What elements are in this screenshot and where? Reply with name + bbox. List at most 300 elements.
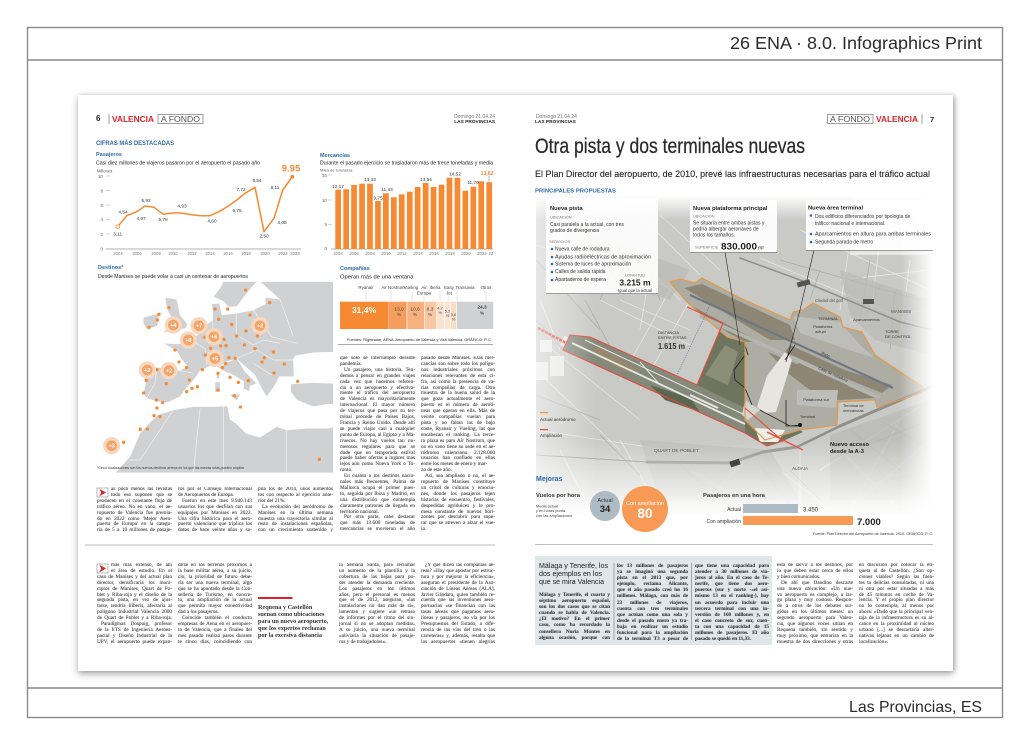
article column 4 bottom <box>339 563 415 645</box>
article column 3 top: rior del 21%. <box>258 498 286 504</box>
chart: airlines stacked bar: Easy <box>444 285 455 290</box>
aerial map: airport expansion <box>536 195 933 515</box>
bar chart: passengers per hour <box>703 493 881 528</box>
boundary: expansion <box>563 307 783 446</box>
article column right 1: de a otros de los debates sur- <box>777 603 853 609</box>
article column 1 bottom: el área de estudio. En el <box>111 568 172 574</box>
article column 1 top: ropuerto de Valencia fue premia- <box>97 510 172 516</box>
sidebar lead column: cuando se habla de Valencia. <box>539 610 610 616</box>
multi-airport bubbles: +4 <box>170 323 177 329</box>
article column 4 bottom: años, pero el personal es menos <box>339 592 415 598</box>
sidebar column 2: 23 millones de viajeros, <box>617 600 688 606</box>
map place labels: Terminal <box>800 414 815 419</box>
sidebar column 2 <box>617 563 688 642</box>
article column 5 top: ródromo valenciano. 2.128.060 <box>421 450 495 456</box>
article column 4 top: cia a un aeropuerto y efectiva- <box>340 385 415 391</box>
stat: flights per hour: Con ampliación <box>626 501 664 507</box>
fades <box>536 195 922 216</box>
article column 5 top: coste, Ryanair y Vueling, las que <box>421 426 495 432</box>
article column 5 bottom: portuarias «se financian con las <box>421 603 495 609</box>
current runway and taxiway <box>690 295 893 388</box>
article column 4 top: merosos regulares para que se <box>340 444 415 450</box>
map place labels: Plataforma <box>813 324 833 329</box>
stat: flights per hour: y en horas punta <box>536 508 566 513</box>
current apron <box>793 316 875 358</box>
sidebar lead column: Málaga y Tenerife, el cuarto y <box>539 592 610 598</box>
panel: new runway: Igual que la actual <box>618 288 652 293</box>
article column 5 top: zontes por descubrir para supe- <box>421 514 495 520</box>
article column right 1 <box>777 563 853 645</box>
chart: cargo bars: 5 <box>324 222 327 227</box>
article column 5 bottom: rencia de las vías del tren o las <box>421 627 495 633</box>
chart: cargo bars: 12,17 <box>332 184 344 189</box>
chart: cargo bars <box>320 153 494 256</box>
chart: cargo bars: 11,70 <box>467 180 479 185</box>
pull quote <box>258 597 329 639</box>
right page header <box>828 114 934 124</box>
article column 4 top: punto de Europa, al Egipto y a Ma- <box>340 432 415 438</box>
road shields <box>729 279 874 467</box>
chart: passengers line: 5,78 <box>158 217 168 222</box>
boundary: current aerodrome <box>670 278 923 440</box>
article column right 1: una nueva ubicación: «Un nue- <box>777 586 853 592</box>
article column 4 bottom: un aumento de la plantilla y la <box>339 568 415 574</box>
article column 2 top: de Aeropuertos de Europa. <box>178 492 234 498</box>
industrial blocks <box>536 336 568 380</box>
article column 1 bottom: Paradigmas Dospuig, profesor <box>101 621 172 627</box>
article column 3 top: resto de instalaciones españolas, <box>258 521 333 527</box>
article column right 1: gidos en los últimos meses: un <box>777 609 853 615</box>
article column 2 bottom: ría ser una nueva terminal, algo <box>178 580 252 586</box>
article column 1 bottom: polígono Industrial Valencia 2000 <box>97 609 172 615</box>
panel: new runway: Nueva pista <box>550 206 583 212</box>
chart: airlines stacked bar: 13,0 <box>394 306 404 312</box>
left page date line <box>454 114 496 125</box>
article column 4 top: rruecos. No hay vuelos tan nu- <box>340 438 415 444</box>
map place labels: QUART DE POBLET <box>654 448 699 454</box>
article column 2 bottom: empresas de Aena en el aeropuer- <box>178 621 252 627</box>
chart: passengers line: 3,11 <box>113 232 122 236</box>
article column 1 bottom: de la ETS de Ingeniería Aeroes- <box>97 627 172 633</box>
chart: passengers line: 2020 <box>260 251 270 256</box>
callout: new access from A-3: Nuevo acceso <box>830 442 869 448</box>
chart: cargo bars: 2004 <box>333 251 343 256</box>
chart: passengers line: 2022 <box>278 251 288 256</box>
article column 4 top: lejos aún como Nueva York o To- <box>340 461 415 467</box>
article column right 2: lencia. Y el propio plan director <box>859 597 934 603</box>
chart: cargo bars: 2008 <box>365 251 375 256</box>
article column 1 top: ría de 5 a 10 millones de pasaje- <box>97 527 172 533</box>
sidebar lead column: séptimo aeropuerto español, <box>539 598 610 604</box>
article column 2 top: Fueron en este mes 9.940.143 <box>182 498 252 504</box>
panel: new runway: Nueva calle de rodadura <box>555 246 610 252</box>
panel: new runway: Ayudas radioeléctricas de aproximación <box>555 254 651 260</box>
article column 2 bottom: mes pasado realizó paros durante <box>178 633 252 639</box>
drop-cap arrow icon, second article <box>97 564 108 573</box>
chart: cargo bars: Miles de toneladas <box>320 168 352 172</box>
article column 4 top: demos a pensar en grandes viajes <box>340 373 415 379</box>
article column right 1: go plazo y muy costoso. Respon- <box>777 597 853 603</box>
panel: new main platform: m² <box>758 246 764 252</box>
chart: passengers line: 9.95 <box>282 164 301 174</box>
map place labels: Pista <box>821 350 831 359</box>
article column 5 bottom: reas? «Hay que apostar por estruc- <box>421 568 495 574</box>
panel: new runway: Calles de salida rápida <box>555 269 606 275</box>
article column right 2: urbano [...] se descartaría alter- <box>859 627 934 633</box>
chart: airlines stacked bar: Compañías <box>340 266 370 272</box>
article column 5 bottom: líneas y pasajeros, no vía por los <box>421 615 495 621</box>
sidebar lead column <box>539 592 610 641</box>
article column 2 bottom: to de Valencia, que a finales del <box>178 627 252 633</box>
pull quote: para un nuevo aeropuerto, <box>258 618 329 625</box>
article column 4 bottom: «aliviaría la situación de pasaje- <box>339 633 415 639</box>
article column 2 bottom: cio, la prioridad de futuro debe- <box>178 574 252 580</box>
map place labels: Calle de rodadura <box>818 365 849 383</box>
article column 5 top: entre los meses de enero y mar- <box>421 461 487 467</box>
panel: new main platform: todos los tamaños. <box>693 232 735 238</box>
chart: passengers line: 6 <box>100 203 103 208</box>
article column 4 top: puede haber ofertas a lugares más <box>340 455 415 461</box>
sidebar column 3: ta con una capacidad de 15 <box>695 624 769 630</box>
chart: airlines stacked bar: 10,6 <box>410 306 420 312</box>
map place labels: Aparcamientos <box>853 317 880 322</box>
sidebar column 3: que tiene una capacidad para <box>695 563 769 569</box>
article column 5 top: cancías son sobre todo los polígo- <box>421 361 495 367</box>
chart: passengers line: 4,08 <box>277 220 287 225</box>
chart: cargo bars: 2022 <box>477 251 487 256</box>
article column 5 bottom: Javier Gándara, quien también re- <box>421 592 495 598</box>
chart: airlines stacked bar: % <box>397 312 402 318</box>
multi-airport bubbles: +3 <box>108 444 115 450</box>
article column 3 top: con un crecimiento sostenido y <box>258 527 333 533</box>
chart: cargo bars: 10 <box>322 198 327 203</box>
leader lines <box>725 250 814 362</box>
panel: new terminal area: Aparcamientos en altura para ambas terminales <box>815 232 932 238</box>
sidebar column 2: funcional para la ampliación <box>617 630 688 636</box>
expansion land <box>697 323 803 446</box>
panel: new runway: Sistema de luces de aproximación <box>555 262 631 268</box>
chart: airlines stacked bar: Vueling <box>404 285 419 290</box>
panel: new runway: UBICACIÓN <box>550 214 572 220</box>
sidebar column 2: ejemplo, reclama Alicante, <box>617 581 688 587</box>
article column 3 top: Manises en la última semana <box>258 510 333 516</box>
sidebar column 3: el caso concreto de sur, cuen- <box>695 618 769 624</box>
sidebar lead column: consellera Nuria Montes en <box>539 629 610 635</box>
stat: flights per hour: con las ampliaciones <box>536 513 572 518</box>
article column 5 top: no en vano tiene su sede en el ae- <box>421 444 495 450</box>
chart: cargo bars: 2020 <box>461 251 471 256</box>
left page header: VALENCIA <box>112 114 154 124</box>
article column right 1: segundo aeropuerto para Valen- <box>777 615 853 621</box>
article column right 2: localización». <box>859 639 888 645</box>
map place labels <box>654 298 912 471</box>
article column 5 top: puerto es el número de aerolí- <box>421 402 495 408</box>
distance line between runways <box>677 305 710 375</box>
chart: cargo bars: 2016 <box>429 251 439 256</box>
chart: airlines stacked bar: % <box>438 310 442 315</box>
right page date line <box>535 114 577 125</box>
article column 4 top: minal procede de Países Bajos, <box>340 414 415 420</box>
article column 5 top: Así, sea ampliado o no, el ae- <box>425 473 495 479</box>
chart: passengers line: Pasajeros <box>96 152 122 158</box>
article column 2 top: Una cifra histórica para el aero- <box>178 516 252 522</box>
bar chart: passengers per hour: 3.450 <box>803 508 819 514</box>
panel: new runway: Apartaderos de espera <box>555 277 606 283</box>
legend: Ampliación <box>540 433 563 438</box>
sidebar column 3 <box>695 563 769 642</box>
sidebar lead column: caso, como ha recordado la <box>539 622 610 628</box>
article column 3 top: muestra una trayectoria similar al <box>258 516 333 522</box>
chart: passengers line: 2010 <box>168 251 178 256</box>
stat: flights per hour: Media actual <box>536 504 558 508</box>
sidebar column 3: nerife, que tiene dos aero- <box>695 581 769 587</box>
callout: runway distance: ENTRE PISTAS <box>658 335 687 340</box>
article column 2 bottom: to, una ampliación de la actual <box>178 597 252 603</box>
panel: new terminal area: Dos edificios diferenciados por tipología de <box>815 214 911 220</box>
callout: runway distance: 1.615 m <box>658 342 685 351</box>
article column 5 top: encabezan el ranking. La terce- <box>421 432 495 438</box>
article column right 2: taja de la infraestructura es su al- <box>859 615 934 621</box>
land masses <box>116 282 333 473</box>
chart: passengers line: 2004 <box>113 251 123 256</box>
panel: new runway: 3.215 m <box>619 278 651 288</box>
article column 4 bottom: que el de 2012, aseguran, «las <box>339 597 415 603</box>
article column 5 top: nes, donde los pasajeros tejen <box>421 491 495 497</box>
panel: new runway: Casi paralela a la actual, con tres <box>550 222 624 228</box>
main title: Otra pista y dos terminales nuevas <box>535 134 805 158</box>
article column 4 top: Por otra parte, cabe destacar <box>344 514 415 520</box>
callout: new access from A-3 <box>830 442 869 455</box>
bar chart: passengers per hour: Con ampliación <box>707 519 741 525</box>
heading: destinations <box>98 265 248 280</box>
chart: airlines stacked bar: % <box>480 310 485 316</box>
chart: airlines stacked bar: % <box>452 316 456 322</box>
destination dots <box>122 288 321 461</box>
article column 2 top: datos de hace veinte años y su- <box>178 527 252 533</box>
darker urban blocks <box>640 258 924 496</box>
article column 4 top: territorio nacional. <box>340 509 379 515</box>
sidebar lead column: ¿El motivo? En el primer <box>539 616 610 622</box>
chart: passengers line: 2008 <box>151 251 161 256</box>
article column 5 bottom: cuerda que las inversiones aero- <box>421 597 495 603</box>
article column 1 bottom: caso de Manises y del actual plan <box>97 574 172 580</box>
chart: passengers line: 2014 <box>205 251 215 256</box>
country borders <box>130 299 297 473</box>
sidebar column 2: cuenta con tres terminales <box>617 606 688 612</box>
sidebar box: Málaga and Tenerife <box>535 556 772 645</box>
chart: passengers line: 5,75 <box>232 208 242 213</box>
article column 4 top: ronto. <box>340 467 352 473</box>
article column right 1: cia, que algunos voces sitúan en <box>777 621 853 627</box>
article column 5 top: lo. <box>421 526 426 532</box>
chart: airlines stacked bar: Fuentes: Flightradar, AENA, Aeropuerto de Valencia y Visit Valencia. GRÁFICO: P. C. <box>347 337 492 342</box>
article column 1 bottom: cipios de Manises, Quart de Po- <box>97 586 172 592</box>
map place labels: MANISES <box>891 309 911 314</box>
map place labels: mercancías <box>843 408 864 413</box>
chart: airlines stacked bar: Transavia <box>455 285 475 290</box>
article column 5 top: zo de este año. <box>421 467 452 473</box>
panel: new runway: SERVICIOS <box>549 239 571 244</box>
sidebar column 3: millones de pasajeros. El año <box>695 630 769 636</box>
stat: flights per hour: Vuelos por hora <box>536 493 581 499</box>
article column 4 bottom: ros y de trabajadores». <box>339 639 387 645</box>
sidebar column 2: que actúan como una sola y <box>617 612 688 618</box>
map place labels: Ciudad del golf <box>815 298 844 303</box>
chart: cargo bars: 13,33 <box>364 177 376 182</box>
sidebar column 2: millones. Málaga, con más de <box>617 593 688 599</box>
map place labels: TORRE <box>885 329 899 334</box>
callout: runway distance <box>658 330 687 351</box>
article column 2 top: equipajes por Manises en 2022. <box>178 510 252 516</box>
article column 4 top: una distribución que contempla <box>340 497 415 503</box>
chart: passengers line: 4,54 <box>118 210 128 214</box>
article column right 2: ni otra por estar situadas a más <box>859 586 934 592</box>
section heading: key figures: CIFRAS MÁS DESTACADAS <box>96 138 175 147</box>
sidebar column 2: que el año pasado creó los 16 <box>617 587 688 593</box>
article column 5 top: muestra de la buena salud de la <box>421 390 495 396</box>
article column 1 bottom: de Quart de Poblet y a Riba-roja. <box>97 615 172 621</box>
article column 1 bottom: pacial y Diseño Industrial de la <box>97 633 172 639</box>
article column 4 top: Un pasajero, una historia. Ten- <box>344 367 415 373</box>
article column right 1: muestra de dos direcciones y otras <box>777 639 853 645</box>
article column right 1: y bien comunicados. <box>777 574 820 580</box>
article column 5 top: despedidas agridulces y le pro- <box>421 503 495 509</box>
article column right 1: De ahí que Dandino descarte <box>781 580 853 586</box>
chart: airlines stacked bar: 24,3 <box>477 304 487 310</box>
sidebar column 2: baja en realizar un estudio <box>617 624 688 630</box>
chart: passengers line <box>96 152 301 256</box>
stat: flights per hour <box>536 486 668 532</box>
sidebar column 3: versión de 160 millones y, en <box>695 612 769 618</box>
sidebar column 3: tercera terminal con una in- <box>695 606 769 612</box>
chart: passengers line: 2 <box>100 232 103 237</box>
article column 4 bottom: cobertura de las bajas para po- <box>339 574 415 580</box>
chart: passengers line: 2018 <box>241 251 251 256</box>
panel: new runway: grados de divergencia <box>550 228 599 234</box>
bar chart: passengers per hour: Actual <box>727 507 741 513</box>
article column 5 top: historias de encuentro, festivales, <box>421 497 495 503</box>
legend <box>540 412 576 438</box>
panel: new main platform: Se situaría entre ambas pistas y <box>693 220 765 226</box>
chart: cargo bars: Durante el pasado ejercicio se trasladaron más de trece toneladas y media <box>320 160 494 166</box>
chart: passengers line: 2012 <box>187 251 197 256</box>
article column 4 top: internacional. El mayor número <box>340 402 415 408</box>
page spread sheet <box>78 95 953 671</box>
article column right 2: ciones viables? Según las fuen- <box>859 574 934 580</box>
chart: passengers line: Casi diez millones de viajeros pasaron por el aeropuerto el pasado año <box>96 160 260 166</box>
panel: new main platform: UBICACIÓN <box>693 214 715 218</box>
chart: passengers line: 8,54 <box>252 178 262 183</box>
chart: cargo bars: Mercancías <box>320 153 350 159</box>
panel: new terminal area: Segunda parada de metro <box>815 240 873 246</box>
article column 4 top: En cuanto a los destinos nacio- <box>344 473 415 479</box>
chart: cargo bars: 2010 <box>381 251 391 256</box>
article column 4 top: que más 13.600 toneladas de <box>340 520 415 526</box>
chart: airlines stacked bar <box>338 266 493 344</box>
article column right 2 <box>859 563 934 645</box>
bar chart: passengers per hour: 7.000 <box>857 517 881 528</box>
article column 3 top: tos con respecto al ejercicio ante- <box>258 492 333 498</box>
pull quote: Requena y Castellón <box>258 604 313 611</box>
article column 1 top <box>97 487 172 533</box>
heading: destinations: Desde Manises se puede volar a casi un centenar de aeropuertos <box>98 274 248 280</box>
current airport ground <box>670 278 923 440</box>
chart: airlines stacked bar: % <box>413 312 418 318</box>
stat: flights per hour: Actual <box>597 498 613 504</box>
chart: airlines stacked bar: 8,3 <box>427 306 434 312</box>
chart: airlines stacked bar: Otros <box>481 285 492 290</box>
chart: airlines stacked bar: Iberia <box>430 285 441 290</box>
article column right 2: ahora: «Dado que la principal ven- <box>859 609 934 615</box>
article column 1 bottom: UPV, el aeropuerto puede expan- <box>97 639 172 645</box>
chart: cargo bars: 2006 <box>349 251 359 256</box>
multi-airport bubbles: +2 <box>166 369 172 375</box>
article column 5 top: pista y no faltan las de bajo <box>421 420 495 426</box>
multi-airport bubbles: +7 <box>196 324 202 330</box>
map place labels: actual <box>815 329 826 334</box>
article column right 2: tes ta delicias consultadas, ni una <box>859 580 934 586</box>
article column 1 bottom: tarse, tendría Ilíberis, afectaría al <box>97 603 172 609</box>
article column 4 bottom: lamentan y sugiere «un retraso <box>339 609 415 615</box>
article column right 2: nativas lejanas en un cambio de <box>859 633 934 639</box>
sidebar lead column: alguna ocasión, porque con <box>539 635 610 641</box>
article column 4 top: se puede viajar casi a cualquier <box>340 426 415 432</box>
article column 1 bottom: segunda pista, en vez de ajus- <box>97 597 172 603</box>
article column 4 top: dude que en temporada estival <box>340 450 415 456</box>
panel: new terminal area: tráfico: nacional e internacional. <box>815 221 885 227</box>
chart: airlines stacked bar: % <box>446 313 450 318</box>
article column 4 bottom: de informes por el ritmo del sin- <box>339 615 415 621</box>
left page header: 6 <box>96 114 101 123</box>
right page header: 7 <box>930 115 934 124</box>
chart: cargo bars: 2012 <box>397 251 407 256</box>
sidebar column 3: mismo 13 en el ranking-), hay <box>695 593 769 599</box>
article column right 1: muy próximo, que entrarían en la <box>777 633 853 639</box>
right page date line: LAS PROVINCIAS <box>535 119 577 125</box>
credit: newspaper: Las Provincias, ES <box>849 699 982 716</box>
legend: Actual aeródromo <box>540 417 576 422</box>
chart: passengers line: 4,60 <box>207 218 217 224</box>
dark access roads <box>734 345 800 426</box>
chart: passengers line: 2,50 <box>259 234 269 238</box>
article column 2 bottom: dad a los pasajeros. <box>178 609 219 615</box>
chart: cargo bars: 23 <box>489 251 494 256</box>
divider under infographic <box>535 544 933 546</box>
chart: airlines stacked bar: 4,7 <box>437 306 444 310</box>
article column 2 top: usuarios los que desfilan con sus <box>178 504 252 510</box>
article column 1 bottom: blet y Riba-roja y el diseño de la <box>97 592 172 598</box>
article column 2 top: puerto valenciano que triplica los <box>178 521 252 527</box>
sidebar column 3: puertos (sur y norte -«el así- <box>695 587 769 593</box>
sidebar column 3: jeros al año. En el caso de Te- <box>695 575 769 581</box>
panel: new runway <box>546 198 658 294</box>
chart: airlines stacked bar: Europa <box>417 290 432 296</box>
chart: airlines stacked bar: Jet <box>446 290 453 296</box>
map place labels: TERMINAL <box>818 316 839 321</box>
sidebar column 3: un acuerdo para incluir una <box>695 600 769 606</box>
map: European destinations <box>103 282 333 473</box>
sidebar column 2: los 13 millones de pasajeros <box>617 563 688 569</box>
article column 2 bottom: la base militar aérea, a su juicio, <box>178 568 252 574</box>
source line: Fuente: Plan Director del Aeropuerto de Valencia, 2010. GRÁFICO: P. C. <box>813 532 933 536</box>
sidebar column 2: desde el pasado enero ya tra- <box>617 618 688 624</box>
pull quote: por la excesiva distancia <box>258 632 322 639</box>
map place labels: Terminal de <box>843 403 864 408</box>
chart: passengers line: 0 <box>100 246 103 252</box>
article column 5 top: nos industriales próximos con <box>421 367 495 373</box>
drop-cap arrow icon, first article <box>97 488 108 497</box>
sidebar box: Málaga and Tenerife: dos ejemplos en los <box>539 569 602 578</box>
